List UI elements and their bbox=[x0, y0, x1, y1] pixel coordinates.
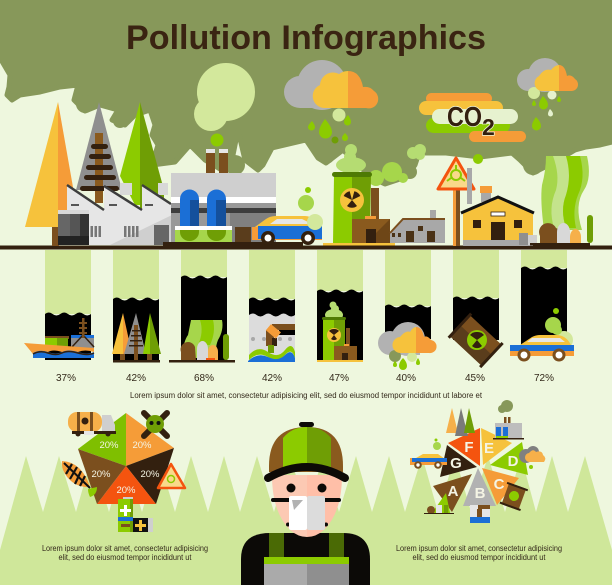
icon: tanker truck bbox=[68, 412, 116, 436]
worker body bbox=[241, 533, 370, 585]
icon: barrel small bbox=[500, 482, 528, 511]
lettered pinwheel chart: E bbox=[484, 440, 494, 457]
label 37%: 37% bbox=[56, 373, 76, 384]
pentagon pie chart: 20% bbox=[116, 485, 136, 496]
icon: grey tree bbox=[76, 102, 122, 203]
icon: CO2 cloud: CO bbox=[447, 101, 482, 132]
center description: Lorem ipsum dolor sit amet, consectetur adipisicing elit, sed do eiusmod tempor incididunt ut labore et bbox=[130, 391, 483, 400]
right description: elit, sed do eiusmod tempor incididunt ut bbox=[412, 553, 546, 562]
icon: green tree bbox=[120, 102, 164, 210]
icon: pipe small bbox=[470, 505, 490, 523]
bar 2: trees, 42% bbox=[112, 250, 161, 362]
lettered pinwheel chart: C bbox=[494, 476, 505, 493]
icon: yellow tree bbox=[25, 102, 80, 246]
worker figure bbox=[241, 422, 370, 585]
pentagon pie chart: 20% bbox=[140, 469, 160, 480]
bar 6: cloud, 40% bbox=[378, 250, 437, 370]
lettered pinwheel chart: A bbox=[448, 483, 459, 500]
bar 1: ship, 37% bbox=[24, 250, 94, 360]
icon: CO2 cloud bbox=[419, 93, 526, 142]
icon: biohazard warning sign bbox=[438, 158, 474, 246]
lettered pinwheel chart: G bbox=[450, 455, 462, 472]
icon: grey low factory bbox=[390, 210, 445, 243]
lettered pinwheel chart: B bbox=[475, 485, 486, 502]
lettered pinwheel chart: F bbox=[464, 439, 474, 456]
pentagon pie chart bbox=[78, 413, 174, 504]
bar 5: nuclear tower, 47% bbox=[317, 250, 363, 362]
icon: damaged leaf bbox=[62, 461, 97, 497]
icon: chimney plant with blue tanks bbox=[163, 149, 303, 246]
icon: biohazard sign bbox=[158, 464, 185, 488]
lettered pinwheel chart bbox=[433, 428, 528, 512]
icon: skull and crossbones bbox=[144, 413, 167, 436]
icon: waste mounds bbox=[519, 215, 593, 246]
worker apron bbox=[264, 557, 349, 585]
icon: small cloud with rain bbox=[517, 58, 578, 130]
icon: plant small bbox=[493, 400, 524, 440]
icon: blue car bbox=[252, 216, 322, 245]
right description bbox=[396, 544, 562, 562]
pentagon pie chart: 20% bbox=[132, 440, 152, 451]
icon: car small bbox=[410, 438, 447, 469]
icon: waste small bbox=[424, 493, 454, 514]
label 47%: 47% bbox=[329, 373, 349, 384]
worker face bbox=[272, 475, 342, 537]
icon: yellow house bbox=[461, 168, 534, 246]
label 42%: 42% bbox=[126, 373, 146, 384]
icon: green toxic waves bbox=[541, 156, 589, 230]
label 72%: 72% bbox=[534, 373, 554, 384]
smoke puffs bbox=[368, 162, 408, 186]
label 40%: 40% bbox=[396, 373, 416, 384]
worker helmet bbox=[268, 422, 345, 478]
pentagon pie chart: 20% bbox=[91, 469, 111, 480]
icon: batteries bbox=[118, 497, 153, 532]
worker eyes and mask bbox=[271, 484, 341, 530]
exhaust smoke bbox=[298, 187, 323, 230]
left description: Lorem ipsum dolor sit amet, consectetur adipisicing bbox=[42, 544, 208, 553]
title: Pollution Infographics bbox=[126, 19, 486, 57]
label 42%: 42% bbox=[262, 373, 282, 384]
icon: nuclear cooling tower bbox=[323, 144, 395, 246]
bar 4: waste pipe, 42% bbox=[248, 250, 295, 362]
left description bbox=[42, 544, 208, 562]
icon: cloud small bbox=[519, 446, 545, 469]
icon: sawtooth factory bbox=[58, 183, 172, 245]
smog cloud background bbox=[0, 0, 612, 184]
worker suspenders bbox=[269, 533, 344, 558]
bar 7: barrel, 45% bbox=[448, 250, 504, 368]
pentagon pie chart: 20% bbox=[99, 440, 119, 451]
icon: large pollution cloud bbox=[284, 60, 378, 144]
green spiked hills bbox=[0, 456, 612, 585]
icon: CO2 cloud: 2 bbox=[482, 114, 495, 140]
bar 3: toxic waste, 68% bbox=[169, 250, 235, 362]
ground line bbox=[0, 246, 612, 250]
lettered pinwheel chart: D bbox=[508, 453, 519, 470]
bar 8: car, 72% bbox=[510, 250, 574, 362]
right description: Lorem ipsum dolor sit amet, consectetur adipisicing bbox=[396, 544, 562, 553]
label 45%: 45% bbox=[465, 373, 485, 384]
green puff bbox=[210, 134, 224, 146]
pale green smoke cloud bbox=[194, 63, 255, 131]
left description: elit, sed do eiusmod tempor incididunt ut bbox=[58, 553, 192, 562]
label 68%: 68% bbox=[194, 373, 214, 384]
icon: trees small bbox=[446, 408, 475, 436]
